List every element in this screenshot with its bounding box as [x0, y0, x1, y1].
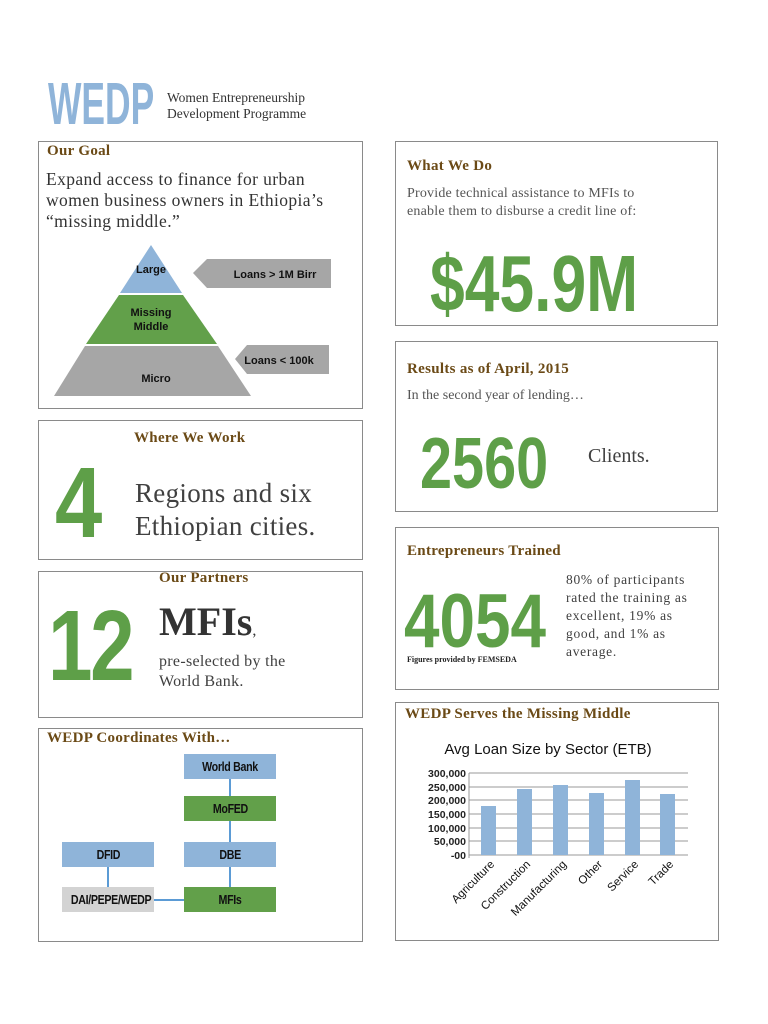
bar chart: 300,000: [428, 768, 466, 780]
text: goal statement: Expand access to finance for urban women business owners in Ethiopia’s “missing middle.”: [46, 169, 323, 231]
bar chart: Agriculture: [450, 859, 497, 906]
heading: Our Partners: [159, 570, 249, 586]
source note: Figures provided by FEMSEDA: [407, 655, 517, 664]
bar chart: Trade: [647, 859, 676, 888]
pyramid chart: Large: [136, 264, 166, 276]
bar chart: 50,000: [434, 836, 466, 848]
heading: What We Do: [407, 158, 492, 174]
text: Provide technical assistance to MFIs to enable them to disburse a credit line of:: [407, 186, 636, 219]
big number 4: 4: [55, 447, 102, 559]
pyramid chart: Loans > 1M Birr: [234, 269, 317, 281]
pyramid chart: [54, 245, 331, 396]
heading: WEDP Coordinates With…: [47, 730, 231, 746]
heading: Entrepreneurs Trained: [407, 543, 561, 559]
org chart: MoFED: [212, 801, 248, 816]
bar chart: 200,000: [428, 795, 466, 807]
panel: entrepreneurs trained: [395, 527, 719, 690]
bar chart: Other: [576, 859, 605, 887]
bar chart: Avg Loan Size by Sector (ETB): [444, 741, 652, 758]
text: 80% of participants rated the training as excellent, 19% as good, and 1% as average.: [566, 572, 688, 659]
pyramid chart: Missing: [131, 307, 171, 319]
org chart: DFID: [96, 847, 120, 862]
heading: WEDP Serves the Missing Middle: [405, 706, 631, 722]
org chart: MFIs: [219, 892, 241, 907]
heading: Results as of April, 2015: [407, 361, 569, 377]
panel: our goal: [38, 141, 363, 409]
pyramid chart: Micro: [141, 373, 171, 385]
heading: Where We Work: [134, 430, 245, 446]
text: pre-selected by the World Bank.: [159, 653, 286, 690]
bar chart: 250,000: [428, 782, 466, 794]
big number 4054: 4054: [404, 579, 546, 664]
text: In the second year of lending…: [407, 388, 584, 403]
big number 12: 12: [48, 590, 132, 702]
org chart: DBE: [219, 847, 241, 862]
text clients: Clients.: [588, 445, 650, 467]
bar chart: 100,000: [428, 823, 466, 835]
org chart: [62, 754, 276, 912]
org chart: World Bank: [202, 759, 258, 774]
bar chart: 150,000: [428, 809, 466, 821]
heading: our goal: Our Goal: [47, 143, 110, 159]
pyramid chart: Middle: [134, 321, 168, 333]
bar chart: Manufacturing: [509, 859, 569, 919]
text MFIs: MFIs,: [159, 599, 256, 644]
panel: where we work: [38, 420, 363, 560]
panel: our partners: [38, 571, 363, 718]
text: Regions and six Ethiopian cities.: [135, 478, 316, 541]
logo: WEDP: [48, 71, 306, 137]
big number 45.9M: $45.9M: [430, 239, 638, 328]
logo: WEDP: Development Programme: [167, 106, 306, 121]
panel: serves missing middle: [395, 702, 719, 941]
pyramid chart: Loans < 100k: [244, 355, 315, 367]
panel: what we do: [395, 141, 718, 326]
bar chart: [428, 741, 688, 919]
panel: results: [395, 341, 718, 512]
big number 2560: 2560: [420, 424, 548, 504]
org chart: DAI/PEPE/WEDP: [71, 892, 151, 907]
bar chart: Service: [606, 859, 641, 894]
logo: WEDP: Women Entrepreneurship: [167, 90, 305, 105]
bar chart: Construction: [479, 859, 533, 913]
bar chart: -00: [451, 850, 466, 862]
logo: WEDP: WEDP: [48, 71, 154, 137]
panel: coordinates: [38, 728, 363, 942]
